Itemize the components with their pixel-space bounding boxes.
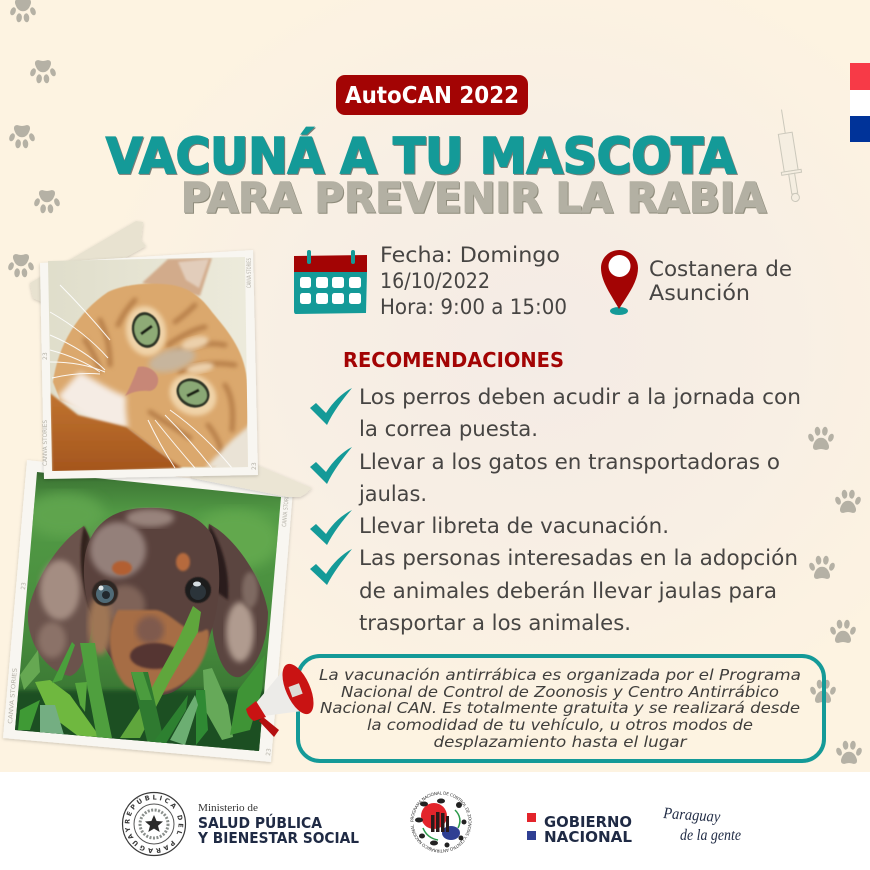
- head: [84, 508, 219, 695]
- location: Costanera de: [649, 257, 792, 281]
- recommendations list: Llevar libreta de vacunación.: [359, 514, 669, 538]
- frame micro labels: CANVA STORIES: [42, 420, 49, 466]
- tape on puppy photo: [190, 460, 312, 497]
- logo: Paraguay de la gente: Paraguay: [662, 805, 722, 826]
- frame micro labels: CANVA STORIES: [7, 668, 19, 724]
- eyes: [92, 580, 118, 606]
- frame micro labels: [7, 491, 291, 756]
- title line 2: PARA PREVENIR LA RABIA: [181, 174, 766, 222]
- frame micro labels: CANVA STORIES: [281, 491, 291, 527]
- paw prints: right column: [807, 426, 863, 764]
- lower fur: [50, 393, 182, 473]
- icon: location pin: [601, 250, 638, 315]
- date and time: 16/10/2022: [380, 269, 490, 293]
- heading: recomendaciones: RECOMENDACIONES: [343, 348, 564, 372]
- recommendations list: [358, 385, 801, 635]
- frame micro labels: 23: [42, 352, 49, 360]
- ear: [142, 258, 212, 296]
- recommendations list: de animales deberán llevar jaulas para: [359, 579, 777, 603]
- logo: Paraguay de la gente: [662, 805, 741, 844]
- icon: calendar: [294, 250, 367, 314]
- nose: [125, 367, 158, 396]
- tape on cat photo: [30, 221, 146, 303]
- puppy picture: [15, 472, 281, 751]
- location: [649, 257, 792, 305]
- grass blades: [120, 606, 201, 738]
- frame micro labels: [42, 258, 258, 470]
- paw prints: left column: [7, 0, 61, 278]
- info callout box: La vacunación antirrábica es organizada por el Programa: [319, 666, 801, 684]
- eye rims: [124, 304, 168, 358]
- logo: zoonosis programme: PROGRAMA NACIONAL DE CONTROL DE ZOONOSIS Y CENTRO ANTIRRÁBICO NACIONAL: [410, 792, 472, 853]
- right ear: [208, 524, 268, 677]
- info callout box: [298, 656, 824, 761]
- grass base: [15, 688, 264, 751]
- footer band: [0, 772, 870, 870]
- logo: ministry wordmark: SALUD PÚBLICA: [198, 813, 322, 832]
- tabby markings: [85, 300, 235, 455]
- check marks: [310, 388, 352, 585]
- left ear: [28, 526, 95, 676]
- recommendations list: jaulas.: [358, 482, 427, 506]
- logo: Gobierno Nacional: NACIONAL: [544, 828, 632, 846]
- recommendations list: la correa puesta.: [359, 417, 538, 441]
- logo: ministry wordmark: [197, 802, 359, 847]
- icon: megaphone: [246, 659, 320, 737]
- logo: Gobierno Nacional: GOBIERNO: [544, 813, 632, 831]
- eyes: [131, 311, 210, 408]
- info callout box: Nacional de Control de Zoonosis y Centro Antirrábico: [341, 683, 779, 701]
- title: [106, 126, 766, 222]
- muzzle: [110, 610, 209, 693]
- white muzzle: [58, 372, 128, 428]
- flag of Paraguay: [850, 63, 870, 142]
- photo: dachshund puppy: [0, 460, 300, 762]
- photo: orange cat: [40, 250, 258, 480]
- date and time: [380, 243, 567, 319]
- cat picture: [48, 257, 248, 471]
- event badge: AutoCAN 2022: AutoCAN 2022: [345, 83, 519, 109]
- whiskers: [50, 285, 232, 468]
- head: [53, 284, 248, 467]
- logo: Paraguay de la gente: de la gente: [680, 827, 741, 844]
- recommendations list: trasportar a los animales.: [359, 611, 631, 635]
- frame micro labels: 23: [265, 748, 273, 756]
- photo frame: [40, 250, 258, 479]
- recommendations list: Llevar a los gatos en transportadoras o: [359, 450, 780, 474]
- title line 1: VACUNÁ A TU MASCOTA: [106, 126, 736, 185]
- logo: ministry wordmark: Y BIENESTAR SOCIAL: [197, 829, 359, 847]
- frame micro labels: 23: [251, 462, 258, 470]
- logo: national seal: REPÚBLICA DEL PARAGUAY: [124, 794, 184, 854]
- logo: Gobierno Nacional: [527, 813, 632, 846]
- frame micro labels: 23: [20, 582, 28, 590]
- recommendations list: Las personas interesadas en la adopción: [359, 546, 798, 570]
- event badge: AutoCAN 2022: [336, 75, 528, 115]
- recommendations list: Los perros deben acudir a la jornada con: [359, 385, 801, 409]
- info callout box: desplazamiento hasta el lugar: [434, 733, 687, 751]
- icon: syringe: [772, 108, 806, 203]
- frame micro labels: CANVA STORIES: [246, 258, 253, 288]
- photo frame: [3, 460, 293, 762]
- date and time: Fecha: Domingo: [380, 243, 560, 267]
- location: Asunción: [649, 281, 750, 305]
- logo: ministry wordmark: Ministerio de: [198, 802, 258, 814]
- date and time: Hora: 9:00 a 15:00: [380, 295, 567, 319]
- info callout box: la comodidad de tu vehículo, u otros modos de: [367, 716, 753, 734]
- info callout box: Nacional CAN. Es totalmente gratuita y se realizará desde: [320, 699, 800, 717]
